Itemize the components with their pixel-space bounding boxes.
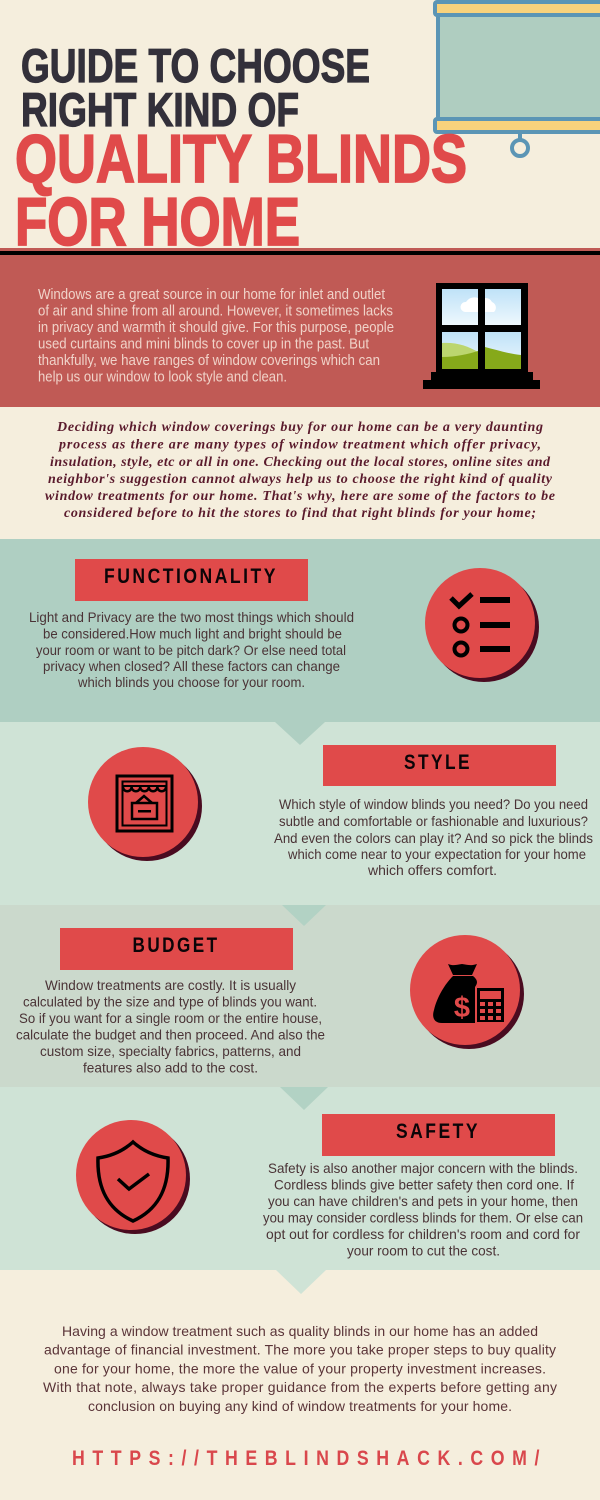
title: GUIDE TO CHOOSE — [21, 39, 370, 92]
text: safety: you can have children's and pets in your home, then — [268, 1193, 578, 1209]
text: budget: So if you want for a single room or the entire house, — [19, 1010, 322, 1026]
text: budget — [16, 977, 325, 1076]
text: safety: opt out for cordless for children's room and cord for — [266, 1226, 580, 1242]
text: style — [274, 796, 593, 878]
text block: deciding paragraph: considered before to hit the stores to find that right blinds for your home; — [64, 506, 536, 521]
heading: budget: BUDGET — [132, 934, 220, 957]
text block: deciding paragraph — [45, 420, 555, 521]
text: style: Which style of window blinds you need? Do you need — [279, 796, 588, 812]
title: FOR HOME — [15, 184, 300, 260]
text: safety: Cordless blinds give better safety then cord one. If — [274, 1176, 574, 1192]
heading: style — [323, 745, 556, 786]
text block: closing paragraph: conclusion on buying any kind of window treatments for your home. — [88, 1398, 512, 1414]
intro text: help us our window to look style and clean. — [38, 370, 287, 386]
text block: deciding paragraph: insulation, style, etc or all in one. Checking out the local stores, online sites and — [50, 455, 551, 470]
text: safety: you may consider cordless blinds for them. Or else can — [263, 1210, 583, 1226]
arrow — [276, 1270, 326, 1294]
text block: deciding paragraph: Deciding which window coverings buy for our home can be a very daunting — [56, 420, 543, 435]
text: style: subtle and comfortable or fashionable and luxurious? — [279, 813, 588, 829]
arrow — [275, 722, 325, 745]
panel: style — [0, 722, 600, 905]
title — [15, 39, 467, 260]
text: safety: Safety is also another major concern with the blinds. — [268, 1160, 578, 1176]
title: RIGHT KIND OF — [21, 83, 299, 136]
icon: shop window — [88, 747, 202, 861]
intro text: used curtains and mini blinds to cover up in the past. But — [38, 336, 369, 352]
arrow — [280, 1087, 328, 1110]
icon: money bag and calculator: $ — [454, 992, 470, 1024]
heading: budget — [60, 928, 293, 970]
text: budget: features also add to the cost. — [83, 1060, 258, 1076]
title: QUALITY BLINDS — [15, 121, 467, 197]
text: budget: custom size, specialty fabrics, patterns, and — [40, 1043, 301, 1059]
panel: budget — [0, 905, 600, 1087]
text: functionality: Light and Privacy are the two most things which should — [29, 609, 354, 625]
heading: safety: SAFETY — [396, 1120, 480, 1143]
text: budget: Window treatments are costly. It is usually — [45, 977, 296, 993]
text: functionality: your room or want to be pitch dark? Or else need total — [36, 642, 346, 658]
icon: roller blind — [435, 2, 600, 156]
text: functionality — [29, 609, 354, 690]
panel: safety — [0, 1087, 600, 1270]
text: budget: calculated by the size and type of blinds you want. — [23, 994, 317, 1010]
arrow — [282, 905, 326, 926]
intro text: thankfully, we have ranges of window coverings which can — [38, 353, 380, 369]
icon: shield — [76, 1120, 190, 1234]
icon: money bag and calculator — [410, 935, 524, 1049]
text: safety: your room to cut the cost. — [347, 1242, 500, 1258]
text: safety — [263, 1160, 583, 1258]
icon: checklist — [425, 568, 539, 682]
text: style: which offers comfort. — [367, 862, 497, 878]
text block: closing paragraph: With that note, always take proper guidance from the experts before getting any — [43, 1379, 557, 1395]
text: functionality: privacy when closed? All these factors can change — [43, 658, 340, 674]
heading: style: STYLE — [404, 751, 472, 774]
text block: deciding paragraph: process as there are many types of window treatment which offer privacy, — [58, 438, 541, 452]
text block: closing paragraph: advantage of financial investment. The more you take proper steps to buy quality — [44, 1342, 556, 1358]
text block: deciding paragraph: neighbor's suggestion cannot always help us to choose the right kind of quality — [48, 472, 553, 487]
icon: window — [423, 283, 540, 389]
panel: functionality — [0, 539, 600, 722]
text block: closing paragraph: Having a window treatment such as quality blinds in our home has an added — [62, 1323, 538, 1339]
intro text — [38, 287, 394, 386]
heading: functionality — [75, 559, 308, 601]
text block: deciding paragraph: window treatments for our home. That's why, here are some of the factors to be — [45, 489, 555, 504]
intro text: of air and shine from all around. However, it sometimes lacks — [38, 304, 393, 320]
panel: intro band — [0, 248, 600, 407]
text block: closing paragraph — [43, 1323, 557, 1414]
text: functionality: be considered.How much light and bright should be — [43, 626, 342, 642]
intro text: in privacy and warmth it should give. For this purpose, people — [38, 320, 394, 336]
text: style: which come near to your expectation for your home — [287, 846, 586, 862]
heading: safety — [322, 1114, 555, 1156]
text block: closing paragraph: one for your home, the more the value of your property investment increases. — [54, 1360, 546, 1376]
text: budget: calculate the budget and then proceed. And also the — [16, 1026, 325, 1042]
heading: functionality: FUNCTIONALITY — [104, 565, 278, 588]
intro text: Windows are a great source in our home for inlet and outlet — [38, 287, 385, 303]
text: functionality: which blinds you choose for your room. — [77, 674, 305, 690]
